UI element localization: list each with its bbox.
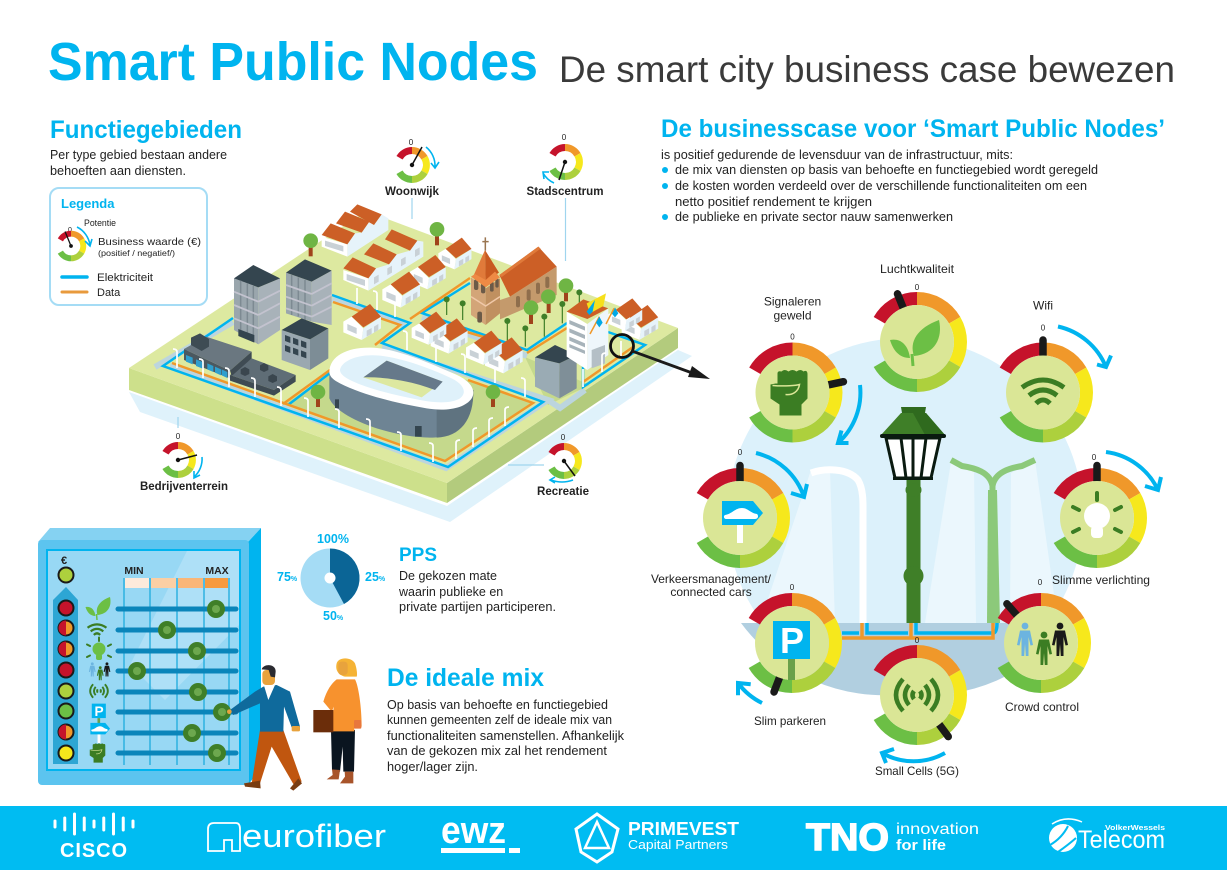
gauge: Bedrijventerrein <box>140 432 228 493</box>
street lamp: double green <box>951 460 1035 623</box>
platform base <box>129 211 692 522</box>
panel: legend: 0 <box>68 227 72 234</box>
gauge: Stadscentrum <box>526 133 604 198</box>
text: businesscase conditions: is positief gedurende de levensduur van de infrastructuur, mits: <box>661 148 1013 162</box>
gauge: Signaleren geweld: Signaleren <box>764 294 821 308</box>
text: businesscase conditions: de mix van diensten op basis van behoefte en functiegebied wordt geregeld <box>675 163 1098 177</box>
panel: legend <box>50 188 207 305</box>
gauge: Stadscentrum: Stadscentrum <box>526 184 604 198</box>
street lamp: white curved <box>811 470 863 623</box>
text: PPS description: private partijen participeren. <box>399 600 556 614</box>
roads with electricity and data lines <box>155 278 645 468</box>
gauge: Signaleren geweld <box>755 294 860 443</box>
gauge: Small Cells (5G): Small Cells (5G) <box>875 764 959 778</box>
small function icons <box>86 597 111 763</box>
text: De ideale mix description: kunnen gemeenten zelf de ideale mix van <box>387 713 612 727</box>
logo: TNO innovation for life: for life <box>896 837 946 854</box>
gray block <box>535 345 577 398</box>
gauge: Crowd control: 0 <box>1038 578 1043 587</box>
logo: TNO innovation for life <box>806 817 979 859</box>
heading: Functiegebieden: Functiegebieden <box>50 116 242 144</box>
heading: businesscase: De businesscase voor ‘Smart Public Nodes’ <box>661 115 1165 143</box>
gauge: Slimme verlichting: Slimme verlichting <box>1052 573 1150 587</box>
text: businesscase conditions <box>661 148 1098 224</box>
gauge: Bedrijventerrein: 0 <box>176 432 181 441</box>
gauge: Woonwijk: Woonwijk <box>385 184 439 198</box>
row houses back <box>322 204 388 257</box>
text: De ideale mix description: hoger/lager zijn. <box>387 760 478 774</box>
total indicator: € <box>61 555 67 567</box>
logo: TNO innovation for life: TNO <box>806 817 889 859</box>
logo: VolkerWessels Telecom: Telecom <box>1078 826 1165 854</box>
gauge: Slimme verlichting <box>1052 452 1161 587</box>
street lamps <box>173 288 621 462</box>
gauge: Verkeersmanagement: connected cars <box>670 585 752 599</box>
gauge: Recreatie: 0 <box>561 433 566 442</box>
cables: electricity and data <box>842 623 997 638</box>
logo: Cisco <box>55 814 133 862</box>
gauge: Bedrijventerrein: Bedrijventerrein <box>140 479 228 493</box>
panel: legend: Potentie <box>84 218 116 228</box>
tower 3 <box>282 318 328 370</box>
gauge: Woonwijk <box>385 138 439 198</box>
stadium <box>329 348 473 438</box>
gauge: Slim parkeren <box>738 583 835 728</box>
gauge: Recreatie: Recreatie <box>537 484 589 498</box>
sliders <box>118 609 236 753</box>
gauge: Luchtkwaliteit <box>879 262 960 386</box>
factory <box>184 333 296 396</box>
text: De ideale mix description <box>387 698 625 774</box>
office towers and factory <box>184 259 332 396</box>
connector lines <box>178 198 566 465</box>
arrow: magnifier to street lamp <box>632 351 710 379</box>
gauge: Wifi: 0 <box>1041 324 1046 332</box>
logo: Cisco: CISCO <box>60 840 127 862</box>
text: De ideale mix description: Op basis van behoefte en functiegebied <box>387 698 608 712</box>
logo: VolkerWessels Telecom: VolkerWessels <box>1105 823 1165 832</box>
chart: PPS pie: 75% <box>277 570 298 584</box>
gauge: Wifi: Wifi <box>1033 298 1053 312</box>
text: De ideale mix description: functionaliteiten samenstellen. Afhankelijk <box>387 729 625 743</box>
church <box>471 237 557 325</box>
title: Smart Public Nodes <box>48 32 538 92</box>
min max scale: MIN <box>124 565 144 577</box>
text: businesscase conditions: de publieke en private sector nauw samenwerken <box>675 210 953 224</box>
panel: city isometric illustration <box>129 198 692 522</box>
gauge: Small Cells (5G) <box>875 636 960 778</box>
panel: legend: Data <box>97 287 121 299</box>
panel: control board <box>38 528 261 785</box>
traffic lights <box>58 600 74 760</box>
subtitle: De smart city business case bewezen <box>559 49 1175 90</box>
church, houses and buildings <box>303 204 658 398</box>
chart: PPS pie: 25% <box>365 570 386 584</box>
row houses second <box>343 229 423 291</box>
gauge: Signaleren geweld: geweld <box>773 308 812 322</box>
gauge: Stadscentrum: 0 <box>562 133 567 142</box>
footer band <box>0 806 1227 870</box>
text: Functiegebieden intro <box>50 148 227 178</box>
heading: De ideale mix: De ideale mix <box>387 664 544 692</box>
logo: VolkerWessels Telecom <box>1049 819 1165 854</box>
gauge: Signaleren geweld: 0 <box>790 332 795 342</box>
chart: PPS pie: 50% <box>323 609 344 623</box>
background: light blue circle with street scene <box>727 338 1083 695</box>
gauge: Slimme verlichting: 0 <box>1092 453 1097 462</box>
board frame <box>38 528 261 785</box>
logo: Primevest <box>576 814 739 862</box>
front trees <box>311 385 500 407</box>
street lamp: central lantern <box>880 407 946 623</box>
slider knobs <box>128 600 231 762</box>
panel: legend: Elektriciteit <box>97 272 153 284</box>
min max scale: MAX <box>205 565 229 577</box>
gauge: Slim parkeren: Slim parkeren <box>754 714 826 728</box>
text: businesscase conditions: netto positief rendement te krijgen <box>675 195 872 209</box>
logo: TNO innovation for life: innovation <box>896 821 979 838</box>
logo: eurofiber: eurofiber <box>242 818 386 854</box>
logo: Primevest: PRIMEVEST <box>628 819 739 839</box>
text: Functiegebieden intro: Per type gebied bestaan andere <box>50 148 227 162</box>
text: PPS description: De gekozen mate <box>399 569 497 583</box>
gauge: Slim parkeren: 0 <box>790 583 795 592</box>
gauge: Verkeersmanagement: Verkeersmanagement/ <box>651 572 772 586</box>
text: PPS description: waarin publieke en <box>398 585 503 599</box>
church trees <box>444 278 582 347</box>
text: PPS description <box>398 569 556 614</box>
heading: PPS: PPS <box>399 545 437 566</box>
figure: man pointing at board <box>227 665 302 791</box>
trees back <box>303 222 444 256</box>
logo: Primevest: Capital Partners <box>628 837 729 852</box>
panel: legend: Business waarde (€) <box>98 236 201 248</box>
gauge: Luchtkwaliteit: Luchtkwaliteit <box>880 262 955 276</box>
tower 1 <box>234 265 280 344</box>
text: businesscase conditions: de kosten worden verdeeld over de verschillende functionaliteiten om een <box>675 179 1087 193</box>
gauge: Wifi <box>1005 298 1111 436</box>
gauge: Luchtkwaliteit: 0 <box>915 283 920 292</box>
text: De ideale mix description: van de gekozen mix zal het rendement <box>387 744 608 758</box>
magnifier <box>610 334 634 358</box>
value column <box>53 587 78 764</box>
min max scale <box>124 565 229 765</box>
total indicator <box>58 555 74 582</box>
gauge: Crowd control <box>1003 578 1084 714</box>
gauge: Recreatie <box>537 433 589 498</box>
gauge: Verkeersmanagement <box>651 448 807 599</box>
figure: woman with briefcase <box>313 658 362 783</box>
gauge: Woonwijk: 0 <box>409 138 414 147</box>
panel: legend: (positief / negatief/) <box>98 249 175 258</box>
detached houses <box>343 238 471 340</box>
panel: legend: Legenda <box>61 196 115 211</box>
chart: PPS pie <box>277 532 386 623</box>
white office <box>567 293 618 370</box>
tower 2 <box>286 259 332 325</box>
houses middle <box>412 298 658 373</box>
gauge: Verkeersmanagement: 0 <box>738 448 743 457</box>
logo: ewz: ewz <box>441 810 506 852</box>
gauge: Crowd control: Crowd control <box>1005 700 1079 714</box>
chart: PPS pie: 100% <box>317 532 349 546</box>
text: Functiegebieden intro: behoeften aan diensten. <box>50 164 186 178</box>
gauge: Small Cells (5G): 0 <box>915 636 920 645</box>
